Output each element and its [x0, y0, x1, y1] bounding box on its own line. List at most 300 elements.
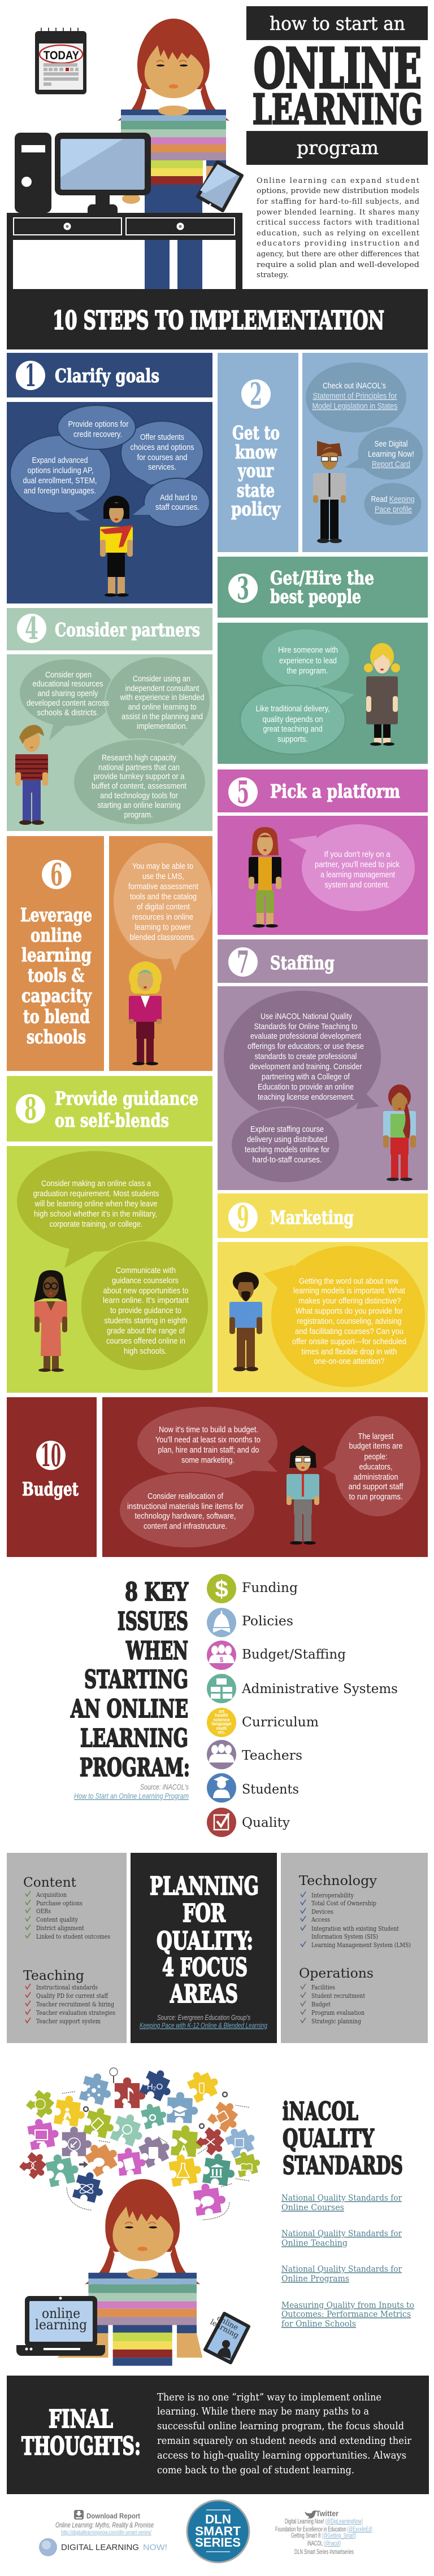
panel: step 2 bubbles: [302, 353, 428, 552]
phone: [205, 2312, 249, 2363]
panel: step 6 bubble: resources in online: [132, 913, 193, 922]
panel: step 4 bubbles: developed content across: [27, 699, 109, 708]
footer: digital learning now logo: NOW!: [143, 2543, 167, 2552]
panel: step 8 bubbles: to provide guidance to: [110, 1306, 181, 1315]
panel: step 4 bubbles: buffet of content, assessment: [92, 782, 186, 791]
panel: step 9 heading: 9: [237, 1199, 249, 1235]
panel: step 7 bubbles: standards to create professional: [254, 1052, 357, 1061]
panel: step 1 bubbles: services.: [148, 463, 176, 472]
source note: How to Start an Online Learning Program: [74, 1791, 189, 1800]
person: woman with long braid: [383, 1084, 416, 1181]
phone: learning: [209, 2318, 240, 2340]
intro text block: education, such as relying on excellent: [257, 229, 420, 238]
girl with laptop: [16, 2179, 249, 2366]
panel: step 7 bubbles: teaching license endorsement.: [258, 1093, 355, 1102]
person: girl with scarf: [100, 496, 133, 597]
panel: step 1 heading: 1: [25, 357, 36, 393]
panel: step 7 bubbles: evaluate professional development: [250, 1032, 361, 1041]
panel: content and teaching: Instructional standards: [36, 1984, 98, 1991]
heading: 8 key issues: 8 KEY: [125, 1578, 188, 1607]
panel: step 2 bubbles: Learning Now!: [368, 450, 414, 459]
administrative systems label: Administrative Systems: [241, 1682, 398, 1696]
panel: step 7 bubbles: delivery using distributed: [247, 1135, 327, 1144]
calendar icon: [35, 28, 86, 94]
panel: step 6 heading: to blend: [23, 1005, 90, 1027]
panel: step 5 heading: [218, 769, 428, 812]
panel: technology and operations: Technology: [299, 1874, 377, 1888]
panel: final thoughts: come back to the goal of student learning.: [157, 2464, 354, 2476]
panel: technology and operations: Integration with existing Student: [311, 1925, 399, 1932]
panel: step 4 bubbles: Consider using an: [133, 675, 190, 684]
panel: step 10 bubbles: Now it's time to build a budget.: [159, 1425, 258, 1434]
panel: step 8 bubbles: Communicate with: [116, 1266, 176, 1275]
panel: step 8 bubbles: students starting in eighth: [104, 1317, 188, 1326]
panel: planning for quality: [131, 1853, 277, 2043]
icon: budget and staffing: [207, 1641, 236, 1670]
person: woman with glasses in coral dress: [34, 1270, 67, 1372]
panel: step 7 heading: Staffing: [270, 952, 335, 974]
panel: step 7 bubbles: Explore staffing course: [250, 1125, 324, 1134]
standards links: National Quality Standards for: [281, 2228, 402, 2238]
bubbles: [10, 405, 210, 527]
intro text block: options, provide new distribution models: [257, 187, 419, 195]
panel: step 1 bubbles: Offer students: [140, 433, 184, 442]
panel: step 10 bubbles: and support staff: [348, 1482, 403, 1492]
panel: step 7 bubbles: offerings for educators; or use these: [248, 1042, 364, 1051]
panel: technology and operations: Strategic planning: [311, 2018, 361, 2025]
panel: planning for quality: 4 FOCUS: [162, 1953, 248, 1982]
panel: step 10 bubbles: administration: [354, 1473, 398, 1482]
panel: step 4 bubbles: national partners that can: [98, 763, 180, 772]
panel: technology and operations: Devices: [311, 1908, 333, 1915]
panel: content and teaching: Teacher evaluation strategies: [36, 2009, 115, 2017]
panel: technology and operations: Operations: [299, 1966, 374, 1981]
panel: step 6 bubble: You may be able to: [132, 862, 193, 871]
panel: content and teaching: Linked to student outcomes: [36, 1933, 110, 1940]
panel: content and teaching: Teaching: [23, 1969, 84, 1983]
panel: step 4 heading: Consider partners: [55, 619, 200, 641]
footer: digital learning now logo: DIGITAL LEARNING: [61, 2543, 139, 2552]
heading: 8 key issues: STARTING: [84, 1665, 188, 1694]
panel: technology and operations: Interoperability: [311, 1892, 354, 1899]
panel: step 8 bubbles: high schools.: [124, 1347, 167, 1356]
panel: step 9 bubble: [218, 1242, 428, 1392]
panel: step 2 heading: know: [235, 441, 277, 463]
panel: step 7 bubbles: Use iNACOL National Quality: [261, 1012, 353, 1021]
puzzle piece icons: [29, 2082, 252, 2208]
panel: step 6 bubble: learning to power: [134, 923, 191, 932]
intro text block: educators providing instruction and: [257, 239, 419, 248]
panel: step 3 heading: 3: [237, 570, 249, 606]
panel: content and teaching: OERs: [36, 1908, 51, 1915]
panel: technology and operations: Student recruitment: [311, 1992, 365, 2000]
panel: step 10 bubbles: plan, hire and train staff; and do: [158, 1446, 259, 1455]
panel: step 10 bubbles: Consider reallocation of: [147, 1492, 224, 1501]
title block: [246, 6, 428, 165]
panel: step 3 bubbles: [218, 623, 428, 764]
footer: twitter: Getting Smart ® (@Getting_Smart): [291, 2533, 356, 2539]
panel: step 5 bubble: partner, you'll need to pick: [315, 860, 400, 869]
panel: step 6 heading: capacity: [21, 985, 92, 1007]
panel: step 1 bubbles: and foreign languages.: [24, 487, 96, 496]
panel: final thoughts: learning. While there may be many paths to a: [157, 2406, 369, 2417]
icon: funding: $: [215, 1576, 228, 1602]
panel: step 10 bubbles: instructional materials line items for: [127, 1502, 244, 1511]
standards links: Outcomes: Performance Metrics: [281, 2309, 411, 2319]
panel: step 10 heading: 10: [41, 1437, 61, 1473]
panel: step 8 bubbles: learn online. It's important: [103, 1296, 189, 1305]
panel: step 4 bubbles: schools & districts.: [37, 708, 98, 718]
panel: step 4 bubbles: and sharing openly: [37, 689, 98, 698]
panel: step 7 bubbles: development and training. Consider: [250, 1062, 362, 1071]
striped shirt: [121, 106, 226, 185]
icon: curriculum: math: [216, 1726, 227, 1731]
panel: step 4 bubbles: independent consultant: [125, 684, 199, 693]
panel: content and teaching: [7, 1853, 127, 2043]
footer: download report: http://digitallearningnow.com/dln-smart-series/: [61, 2530, 151, 2536]
panel: planning for quality: Source: Evergreen Education Group's: [157, 2013, 250, 2022]
heading: 8 key issues: WHEN: [125, 1637, 188, 1665]
icon: curriculum: health: [215, 1713, 228, 1718]
icon: curriculum: etc.: [218, 1730, 225, 1735]
panel: step 6 heading: schools: [27, 1026, 86, 1048]
panel: step 4 bubbles: provide turnkey support or a: [94, 772, 185, 781]
panel: final thoughts: [7, 2376, 429, 2494]
computer tower: [15, 133, 51, 213]
heading: iNACOL quality standards: iNACOL: [283, 2097, 358, 2126]
panel: step 1 bubbles: staff courses.: [155, 503, 199, 512]
footer: DLN smart series badge: [187, 2500, 249, 2562]
laptop: learning: [35, 2317, 87, 2333]
source note: [74, 1782, 189, 1800]
panel: step 3 heading: [218, 557, 428, 618]
panel: step 4 bubbles: implementation.: [137, 722, 188, 731]
intro text block: Online learning can expand student: [257, 177, 420, 185]
panel: step 5 bubble: If you don't rely on a: [324, 850, 390, 859]
intro text block: [257, 177, 420, 279]
intro text block: agency, but there are other differences that: [257, 250, 420, 259]
panel: content and teaching: Quality PD for current staff: [36, 1992, 108, 2000]
puzzle pieces cluster: [19, 2065, 262, 2220]
panel: step 10 bubbles: to run programs.: [349, 1493, 402, 1502]
funding label: Funding: [242, 1581, 298, 1595]
footer: download report: [55, 2510, 154, 2536]
students label: Students: [242, 1782, 299, 1797]
panel: step 5 heading: Pick a platform: [270, 780, 400, 802]
quality label: Quality: [242, 1816, 290, 1830]
panel: step 10 bubbles: [102, 1397, 428, 1557]
panel: step 4 bubbles: and online learning to: [128, 703, 197, 712]
title block: program: [297, 137, 379, 159]
title block: how to start an: [270, 12, 405, 34]
panel: step 2 heading: [218, 353, 298, 552]
panel: step 4 bubbles: with experience in blended: [120, 693, 205, 702]
panel: step 8 bubbles: will be learning online when they leave: [34, 1200, 157, 1209]
panel: step 6 heading: Leverage: [20, 904, 92, 926]
icon: quality: [207, 1808, 236, 1837]
heading: iNACOL quality standards: [283, 2097, 403, 2180]
panel: step 1 bubbles: options including AP,: [27, 466, 94, 475]
panel: step 9 bubble: one-on-one attention?: [314, 1357, 384, 1366]
panel: technology and operations: Access: [311, 1916, 330, 1923]
panel: planning for quality: AREAS: [170, 1980, 238, 2009]
heading: 8 key issues: PROGRAM:: [80, 1753, 190, 1782]
panel: content and teaching: Acquisition: [36, 1891, 67, 1899]
panel: step 5 bubble: system and content.: [324, 881, 390, 890]
panel: content and teaching: Content quality: [36, 1916, 79, 1923]
panel: step 1 bubbles: dual enrollment, STEM,: [23, 476, 97, 486]
puzzle piece icons: H₂O: [147, 2082, 163, 2092]
girl figure: [57, 2179, 202, 2366]
panel: step 10 bubbles: content and infrastructure.: [144, 1522, 227, 1531]
panel: content and teaching: Teacher support system: [36, 2018, 101, 2025]
panel: technology and operations: Information System (SIS): [311, 1933, 378, 1940]
intro text block: critical success factors with traditional: [257, 218, 419, 227]
panel: step 4 bubbles: and technology tools for: [100, 791, 178, 801]
panel: step 3 bubbles: the program.: [287, 667, 328, 676]
panel: step 1 bubbles: for courses and: [137, 453, 188, 462]
icon: budget and staffing: $: [220, 1656, 224, 1664]
policies label: Policies: [242, 1614, 293, 1629]
panel: step 6 heading: tools &: [28, 964, 84, 986]
panel: step 10 bubbles: budget items are: [349, 1442, 402, 1451]
heading: 8 key issues: AN ONLINE: [70, 1695, 188, 1724]
panel: technology and operations: [281, 1853, 428, 2043]
panel: content and teaching: Content: [23, 1875, 77, 1890]
tablet: [198, 162, 242, 211]
panel: step 8 bubbles: graduation requirement. Most students: [33, 1189, 159, 1199]
panel: step 10 bubbles: You'll need at least six months to: [155, 1436, 261, 1445]
panel: planning for quality: QUALITY:: [157, 1927, 253, 1956]
panel: step 8 bubbles: guidance counselors: [112, 1276, 179, 1285]
person: man with glasses: [313, 441, 346, 543]
icon: funding: [207, 1574, 236, 1603]
standards links: Online Programs: [281, 2273, 349, 2284]
panel: step 6 bubble: use the LMS,: [142, 872, 184, 881]
panel: technology and operations: Budget: [311, 2001, 331, 2008]
panel: step 9 heading: Marketing: [270, 1206, 354, 1228]
panel: step 2 heading: state: [237, 479, 275, 501]
panel: step 1 bubbles: Provide options for: [68, 420, 129, 429]
standards links: for Online Schools: [281, 2319, 356, 2329]
source note: Source: iNACOL's: [140, 1782, 189, 1791]
panel: step 10 bubbles: educators,: [359, 1463, 392, 1472]
panel: step 9 bubble: makes your offering distinctive?: [298, 1297, 401, 1306]
pigtails: [118, 82, 229, 128]
panel: step 3 bubbles: Hire someone with: [278, 646, 338, 655]
panel: step 6 heading: learning: [21, 944, 92, 966]
panel: step 8 heading: on self-blends: [55, 1109, 169, 1131]
panel: step 10 bubbles: some marketing.: [181, 1456, 235, 1465]
panel: step 6 bubble: tools and the catalog: [130, 893, 197, 902]
panel: step 8 heading: Provide guidance: [55, 1087, 198, 1109]
footer: download report: Download Report: [86, 2512, 141, 2520]
icon: teachers: [207, 1740, 236, 1769]
person: woman in black jacket: [249, 827, 281, 928]
icon: curriculum: science: [213, 1717, 230, 1722]
panel: content and teaching: Purchase options: [36, 1900, 83, 1907]
panel: step 3 heading: best people: [270, 585, 361, 607]
person: man with beard in blue shirt: [229, 1272, 262, 1371]
panel: step 9 bubble: offer onsite support—for scheduled: [292, 1337, 406, 1346]
panel: technology and operations: Learning Management System (LMS): [311, 1941, 411, 1949]
budget/staffing label: Budget/Staffing: [242, 1647, 346, 1662]
panel: technology and operations: Facilities: [311, 1984, 335, 1991]
panel: content and teaching: Teacher recruitment & hiring: [36, 2001, 114, 2008]
panel: step 1 bubbles: [7, 402, 212, 603]
panel: step 8 bubbles: high school whether it's in the military,: [34, 1210, 157, 1219]
panel: step 8 bubbles: courses offered online in: [106, 1337, 185, 1346]
panel: step 4 bubbles: [7, 654, 212, 831]
icon: curriculum: language: [211, 1721, 232, 1726]
laptop: [16, 2296, 105, 2356]
panel: step 2 heading: 2: [250, 376, 262, 412]
panel: step 6 heading: 6: [50, 856, 63, 893]
panel: step 7 bubbles: partnering with a College of: [262, 1073, 350, 1082]
heading: iNACOL quality standards: QUALITY: [283, 2124, 374, 2153]
panel: final thoughts: FINAL: [49, 2405, 113, 2434]
panel: step 2 bubbles: See Digital: [374, 440, 408, 449]
panel: step 7 bubbles: Education to provide an online: [258, 1083, 354, 1092]
laptop: online: [42, 2306, 80, 2321]
panel: step 8 bubbles: [7, 1146, 212, 1393]
panel: step 8 bubbles: Consider making an online class a: [41, 1179, 151, 1188]
girl at desk: [118, 19, 229, 289]
panel: step 2 heading: your: [237, 460, 274, 482]
panel: step 6 heading: [7, 836, 104, 1071]
panel: step 6 heading: online: [31, 924, 82, 946]
panel: step 5 heading: 5: [237, 774, 249, 810]
desk: [7, 213, 242, 289]
standards links: Online Teaching: [281, 2238, 348, 2248]
footer: twitter: Twitter: [316, 2509, 338, 2518]
panel: final thoughts: There is no one “right” way to implement online: [157, 2391, 381, 2403]
panel: step 9 bubble: registration, counseling, advising: [297, 1317, 401, 1326]
panel: planning for quality: Keeping Pace with K-12 Online & Blended Learning: [140, 2021, 268, 2030]
panel: step 9 bubble: What supports do you provide for: [296, 1307, 403, 1316]
panel: step 2 heading: policy: [231, 498, 281, 520]
panel: step 3 heading: Get/Hire the: [270, 567, 374, 589]
steps banner: [7, 289, 428, 349]
panel: step 10 bubbles: The largest: [358, 1432, 393, 1441]
panel: step 4 bubbles: assist in the planning and: [121, 712, 203, 721]
panel: step 6 bubble: formative assessment: [128, 882, 198, 891]
panel: step 6 bubble: [109, 836, 212, 1071]
pants: [145, 185, 202, 289]
footer: twitter: [275, 2509, 372, 2556]
panel: step 2 bubbles: Check out iNACOL's: [323, 382, 386, 391]
panel: step 7 heading: 7: [237, 944, 249, 980]
footer: twitter: Digital Learning Now! (@DigLearningNow): [285, 2518, 363, 2525]
panel: step 7 heading: [218, 939, 428, 983]
panel: step 2 bubbles: Statement of Principles for: [313, 392, 397, 401]
intro text block: power blended learning. It shares many: [257, 208, 420, 217]
panel: step 5 bubble: [218, 816, 428, 935]
panel: step 10 bubbles: technology hardware, software,: [134, 1512, 236, 1521]
footer: DLN smart series badge: SMART: [195, 2524, 241, 2538]
teachers label: Teachers: [242, 1748, 302, 1763]
panel: step 4 bubbles: program.: [124, 811, 153, 820]
footer: DLN smart series badge: SERIES: [195, 2535, 241, 2549]
panel: step 10 bubbles: people:: [364, 1453, 388, 1462]
panel: step 3 bubbles: quality depends on: [262, 715, 323, 724]
panel: final thoughts: remain squarely on student needs and extending their: [157, 2435, 411, 2447]
panel: step 7 bubbles: hard-to-staff courses.: [252, 1156, 322, 1165]
footer: twitter: DLN Smart Series #smartseries: [294, 2549, 354, 2556]
panel: step 1 bubbles: Expand advanced: [32, 456, 88, 465]
standards links: Measuring Quality from Inputs to: [281, 2300, 414, 2310]
panel: step 4 bubbles: Consider open: [45, 671, 92, 680]
panel: step 1 bubbles: choices and options: [130, 443, 194, 452]
person: person with glasses and red tie: [287, 1445, 319, 1545]
panel: step 9 heading: [218, 1193, 428, 1238]
footer: twitter: iNACOL (@nacol): [307, 2540, 341, 2547]
heading: 8 key issues: LEARNING: [80, 1724, 188, 1753]
panel: step 1 bubbles: Add hard to: [160, 493, 197, 502]
heading: 8 key issues: ISSUES: [118, 1607, 188, 1636]
small gears and arrows: [62, 2068, 249, 2220]
panel: step 8 bubbles: corporate training, or college.: [50, 1220, 142, 1229]
panel: step 8 heading: [7, 1076, 212, 1142]
intro text block: require a solid plan and well-developed: [257, 261, 419, 269]
monitor: [55, 133, 151, 213]
panel: step 2 bubbles: Pace profile: [375, 505, 412, 514]
panel: step 4 heading: [7, 608, 212, 650]
panel: step 1 bubbles: credit recovery.: [73, 430, 122, 439]
icon: curriculum: [207, 1708, 236, 1737]
standards links: Online Courses: [281, 2202, 344, 2212]
panel: final thoughts: successful online learning program, the focus should: [157, 2420, 404, 2432]
panel: step 8 heading: 8: [24, 1091, 37, 1127]
intro text block: for staffing for hard-to-fill subjects, and: [257, 198, 419, 206]
standards links: National Quality Standards for: [281, 2264, 402, 2274]
panel: technology and operations: Total Cost of Ownership: [311, 1900, 376, 1907]
panel: step 8 bubbles: grade about the range of: [107, 1327, 185, 1336]
panel: step 2 bubbles: Report Card: [372, 460, 410, 469]
person: blonde woman in pink blazer: [129, 961, 162, 1065]
panel: planning for quality: FOR: [183, 1899, 225, 1928]
panel: step 9 bubble: times and flexible drop in with: [302, 1348, 397, 1357]
panel: step 2 bubbles: Model Legislation in States: [312, 402, 398, 411]
panel: step 6 bubble: of digital content: [137, 903, 190, 912]
calendar icon: TODAY: [44, 49, 79, 62]
panel: final thoughts: access to high-quality learning opportunities. Always: [157, 2450, 406, 2461]
panel: step 2 bubbles: Read Keeping: [371, 495, 415, 504]
footer: twitter: Foundation for Excellence in Education (@ExcelinEd): [275, 2526, 372, 2533]
panel: step 4 bubbles: Research high capacity: [102, 754, 177, 763]
panel: step 2 heading: Get to: [232, 422, 280, 444]
panel: step 3 bubbles: supports.: [277, 735, 308, 744]
panel: step 8 bubbles: about new opportunities to: [103, 1287, 189, 1296]
phone: online: [215, 2314, 240, 2332]
person: man in striped shirt: [15, 725, 48, 825]
standards links: National Quality Standards for: [281, 2193, 402, 2203]
panel: step 3 bubbles: experience to lead: [279, 657, 337, 666]
icon: curriculum: art: [219, 1709, 224, 1714]
panel: step 10 heading: Budget: [22, 1478, 79, 1500]
panel: step 4 bubbles: starting an online learning: [97, 801, 181, 810]
icon: administrative systems: [207, 1674, 236, 1703]
panel: step 1 heading: [7, 353, 212, 397]
heading: 8 key issues: [70, 1578, 190, 1782]
panel: step 4 bubbles: educational resources: [33, 680, 103, 689]
panel: step 4 heading: 4: [25, 610, 38, 646]
icon: students: [207, 1773, 236, 1803]
standards links: [281, 2193, 414, 2329]
panel: step 7 bubbles: Standards for Online Teaching to: [254, 1022, 357, 1031]
panel: step 3 bubbles: Like traditional delivery,: [255, 705, 330, 714]
icon: policies: [207, 1608, 236, 1637]
